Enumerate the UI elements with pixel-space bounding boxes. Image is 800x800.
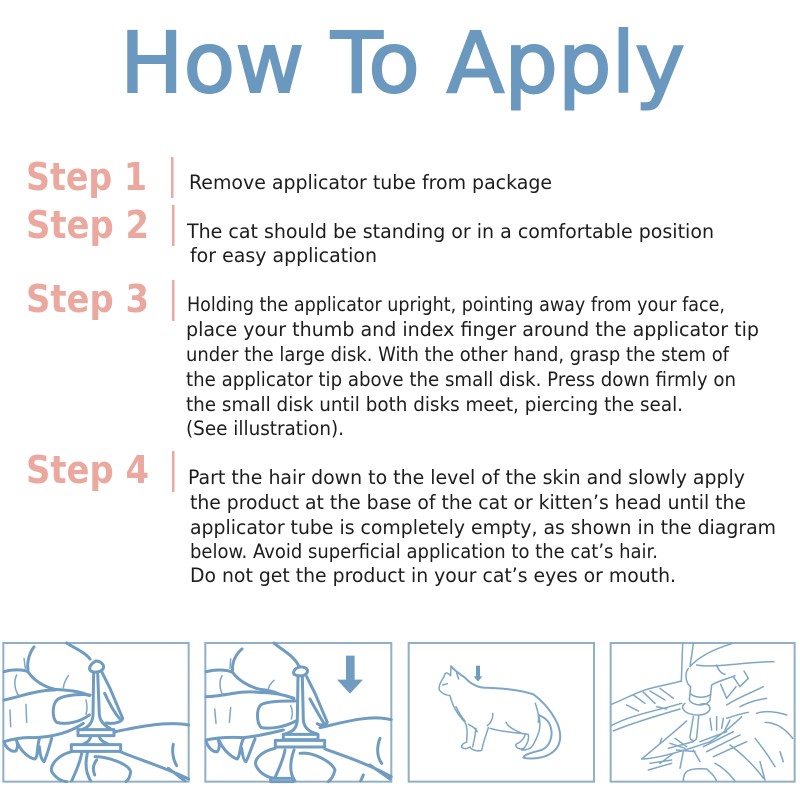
step 3: place your thumb and index finger around the applicator tip <box>186 318 759 341</box>
panel: apply to skin <box>611 643 795 782</box>
step 1: Step 1 <box>26 155 147 199</box>
title: How To Apply <box>120 14 685 112</box>
icon: fingers holding applicator <box>4 643 189 782</box>
step 4: applicator tube is completely empty, as shown in the diagram <box>190 516 776 539</box>
step 4 <box>26 448 776 587</box>
step 3: the small disk until both disks meet, piercing the seal. <box>186 393 683 416</box>
step 3: Step 3 <box>26 277 149 321</box>
step 2 <box>26 203 714 267</box>
step 4: Part the hair down to the level of the skin and slowly apply <box>188 466 745 489</box>
icon: small arrow <box>474 666 482 682</box>
step 2: The cat should be standing or in a comfortable position <box>186 220 714 243</box>
step 2: for easy application <box>190 244 377 267</box>
icon: fingers pressing applicator <box>206 643 391 782</box>
step 3: Holding the applicator upright, pointing away from your face, <box>187 293 725 316</box>
step 3: the applicator tip above the small disk. Press down firmly on <box>186 368 736 391</box>
icon: applying product to fur <box>611 644 793 781</box>
step 1 <box>26 155 552 199</box>
step 1: Remove applicator tube from package <box>189 171 552 194</box>
step 2: Step 2 <box>26 203 149 247</box>
step 3: under the large disk. With the other hand, grasp the stem of <box>186 343 730 366</box>
panel: cat <box>409 643 594 782</box>
step 4: the product at the base of the cat or kitten’s head until the <box>190 491 746 514</box>
panel: pinch applicator <box>3 643 189 782</box>
step 4: Do not get the product in your cat’s eyes or mouth. <box>190 564 676 587</box>
step 4: below. Avoid superficial application to the cat’s hair. <box>190 540 658 563</box>
step 3: (See illustration). <box>186 417 344 440</box>
step 4: Step 4 <box>26 448 149 492</box>
icon: down arrow <box>337 656 363 694</box>
step 3 <box>26 277 759 440</box>
icon: cat outline <box>439 666 560 758</box>
panel: press down <box>205 643 391 782</box>
